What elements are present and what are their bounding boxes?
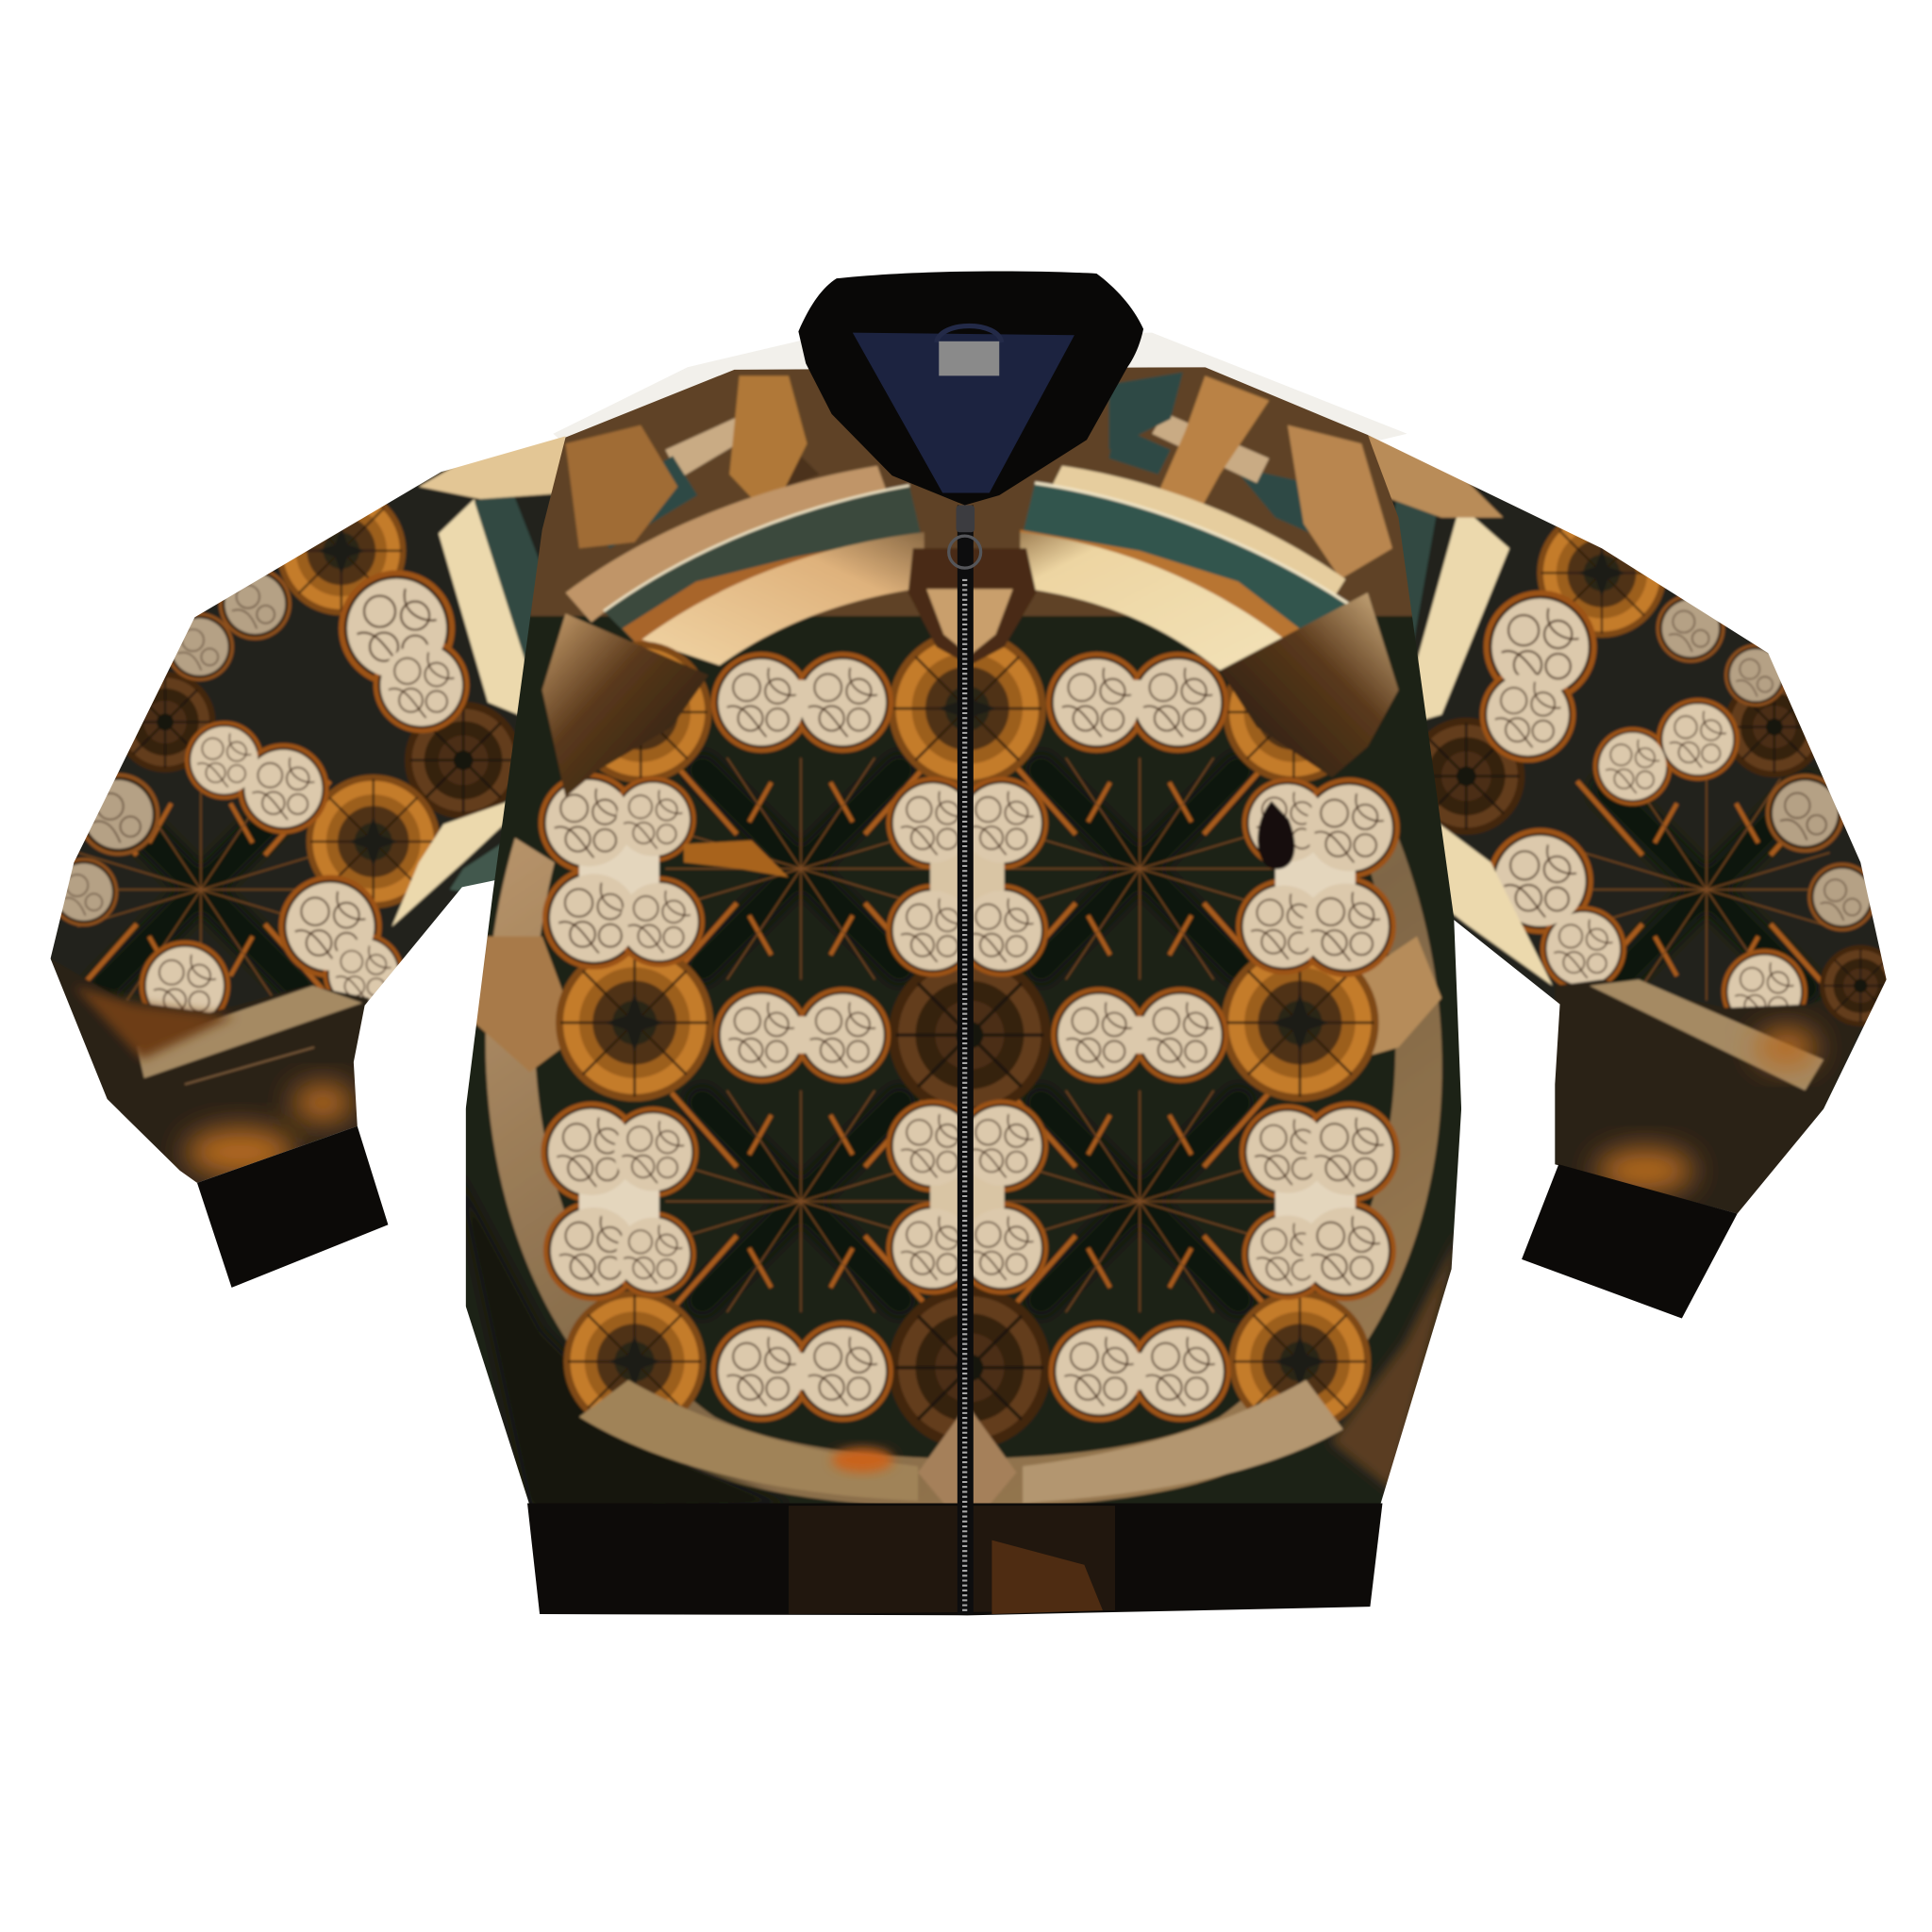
- left sleeve medallions: [115, 486, 522, 908]
- right sleeve cream band: [1417, 515, 1511, 721]
- side tan flap left: [475, 934, 564, 1072]
- cream arc bands: [641, 532, 1291, 671]
- stars: [665, 758, 1275, 1312]
- clover: middle row: [713, 987, 1228, 1083]
- zipper pull ring: [949, 536, 981, 568]
- zipper: [949, 506, 981, 1614]
- left sleeve star: [65, 778, 337, 1001]
- right sleeve star: [1571, 778, 1842, 1001]
- clover: top row: [711, 652, 1228, 753]
- right sleeve: [1368, 435, 1887, 1213]
- right sleeve lower panel: [1557, 978, 1862, 1202]
- hem orange detail: [991, 1541, 1103, 1614]
- right sleeve clover motifs: [1480, 591, 1876, 1035]
- hem: [527, 1503, 1382, 1615]
- upper yoke print: [530, 358, 1417, 623]
- lower ring band: [486, 838, 1442, 1507]
- orange glow: [832, 1448, 893, 1473]
- clover: right cluster upper: [1236, 777, 1400, 977]
- centre V ribbon: [908, 548, 1036, 665]
- left sleeve: [51, 436, 566, 1183]
- orange detail left: [684, 841, 789, 877]
- collar: [798, 271, 1143, 506]
- left sleeve lower panel: [62, 977, 371, 1167]
- clover: left cluster lower: [541, 1102, 698, 1301]
- clover: centre column: [886, 776, 1048, 1294]
- bottom sweep bands: [579, 1380, 918, 1501]
- clover: right cluster lower: [1240, 1102, 1400, 1301]
- white shoulder panels: [553, 333, 1407, 446]
- hanger loop: [937, 325, 1002, 342]
- clover: bottom row: [711, 1321, 1231, 1422]
- inner neck lining: [853, 333, 1074, 492]
- right cuff: [1522, 1164, 1738, 1319]
- bottom V ribbon: [918, 1405, 1017, 1509]
- product photo: bomber jacket: [51, 272, 1887, 1615]
- zipper slider: [957, 506, 974, 532]
- clover: left cluster upper: [539, 773, 705, 970]
- lower left shadow: [466, 1186, 780, 1504]
- left sleeve clover motifs: [49, 567, 470, 1031]
- hem centre patch: [789, 1506, 1115, 1614]
- right sleeve medallions: [1428, 526, 1815, 836]
- left sleeve cream band: [437, 498, 525, 717]
- dark teardrop hole: [1257, 801, 1294, 869]
- jacket body: [456, 358, 1478, 1516]
- corner flares: [542, 592, 1398, 797]
- medallions: [556, 629, 1379, 1449]
- left sleeve shoulder tan: [417, 436, 566, 502]
- side tan flap right: [1356, 937, 1441, 1059]
- teal and rust arcs: [604, 486, 924, 649]
- neck label: [939, 341, 999, 375]
- left cuff: [197, 1126, 388, 1288]
